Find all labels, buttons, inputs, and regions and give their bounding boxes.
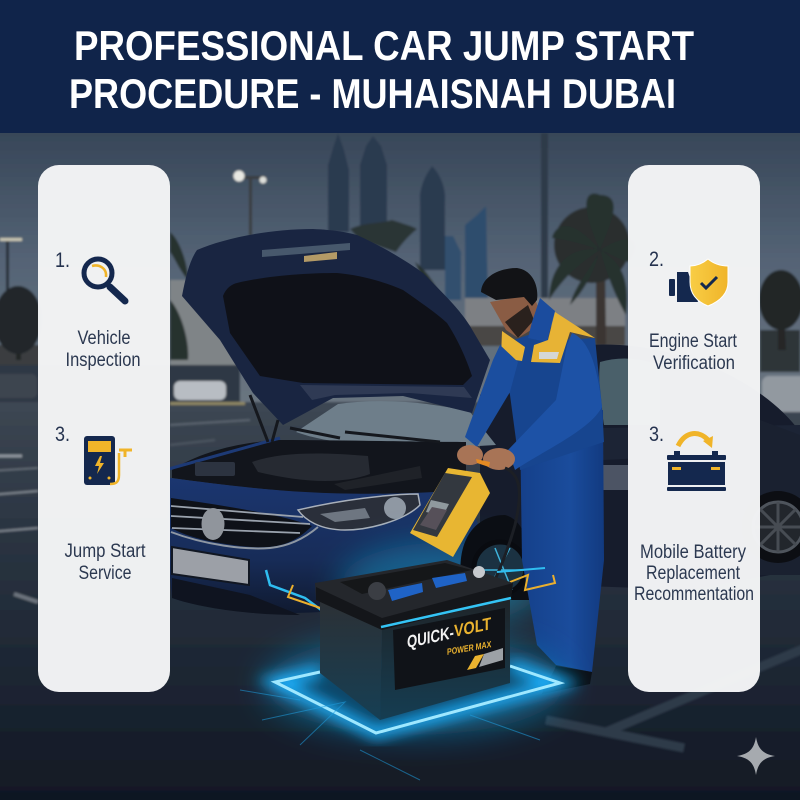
battery label: POWER MAX	[447, 639, 491, 657]
step 2 label: Verification	[653, 353, 735, 374]
step 3 number: 3.	[649, 423, 664, 446]
battery with glowing platform	[240, 560, 565, 780]
technician in blue coverall	[410, 268, 604, 694]
title: PROFESSIONAL CAR JUMP START	[74, 22, 694, 69]
sparkle watermark	[737, 737, 775, 775]
battery body	[320, 600, 382, 720]
plate	[172, 547, 249, 585]
step 2 label	[649, 331, 738, 374]
beard	[505, 305, 534, 338]
title: PROCEDURE - MUHAISNAH DUBAI	[69, 70, 676, 117]
car: open hood sedan	[165, 229, 800, 627]
battery top	[315, 560, 513, 630]
palm trees	[0, 194, 800, 360]
icon: multimeter with cable	[84, 436, 132, 485]
icon: shield with engine block	[669, 259, 728, 306]
step 3 label: Mobile Battery	[640, 542, 746, 563]
neck and face	[490, 294, 544, 338]
emblem	[202, 508, 224, 540]
headlight	[298, 494, 420, 530]
legs	[520, 410, 604, 672]
step 1 label: Vehicle	[78, 328, 130, 349]
platform glow	[265, 635, 565, 735]
header band	[0, 0, 800, 133]
hands	[457, 445, 483, 465]
background buildings and parked cars	[0, 280, 800, 412]
battery label: VOLT	[454, 613, 492, 641]
car front	[168, 478, 510, 613]
hood struts	[250, 395, 278, 442]
step 3 label	[64, 541, 146, 584]
step 1 label	[66, 328, 140, 371]
windshield	[296, 401, 496, 447]
lower grille	[172, 578, 300, 615]
step 3 label: Recommentation	[634, 584, 754, 605]
open hood	[182, 229, 490, 425]
lightning wires	[266, 570, 332, 618]
battery label: QUICK-	[407, 622, 454, 652]
step 1 label: Inspection	[66, 350, 140, 371]
circuit traces	[240, 690, 540, 780]
step 3 label: Service	[78, 563, 132, 584]
boots	[542, 666, 592, 694]
street lamps and poles	[0, 133, 548, 370]
arms	[465, 345, 518, 447]
engine bay	[172, 440, 466, 496]
car body rear side	[480, 344, 800, 590]
title	[69, 22, 694, 117]
icon: battery with replace arrow	[667, 434, 726, 491]
panel: right steps	[628, 165, 760, 692]
step 3 label	[634, 542, 754, 605]
hair	[481, 268, 537, 306]
collar	[528, 298, 555, 342]
skyline towers	[328, 133, 488, 303]
icon: magnifying glass	[84, 259, 125, 301]
front wheel	[460, 515, 531, 600]
jump starter	[410, 459, 519, 590]
step 1 number: 1.	[55, 249, 70, 272]
step 2 number: 2.	[649, 248, 664, 271]
yellow yoke	[501, 312, 595, 363]
step 3 number: 3.	[55, 423, 70, 446]
grille	[171, 498, 318, 548]
torso	[500, 335, 604, 470]
battery label	[393, 608, 505, 690]
step 3 label: Replacement	[646, 563, 741, 584]
panel: left steps	[38, 165, 170, 692]
wipers	[290, 428, 440, 442]
step 3 label: Jump Start	[64, 541, 146, 562]
step 2 label: Engine Start	[649, 331, 738, 352]
parking lot lines	[0, 420, 800, 748]
cyan glow on car	[340, 543, 540, 627]
